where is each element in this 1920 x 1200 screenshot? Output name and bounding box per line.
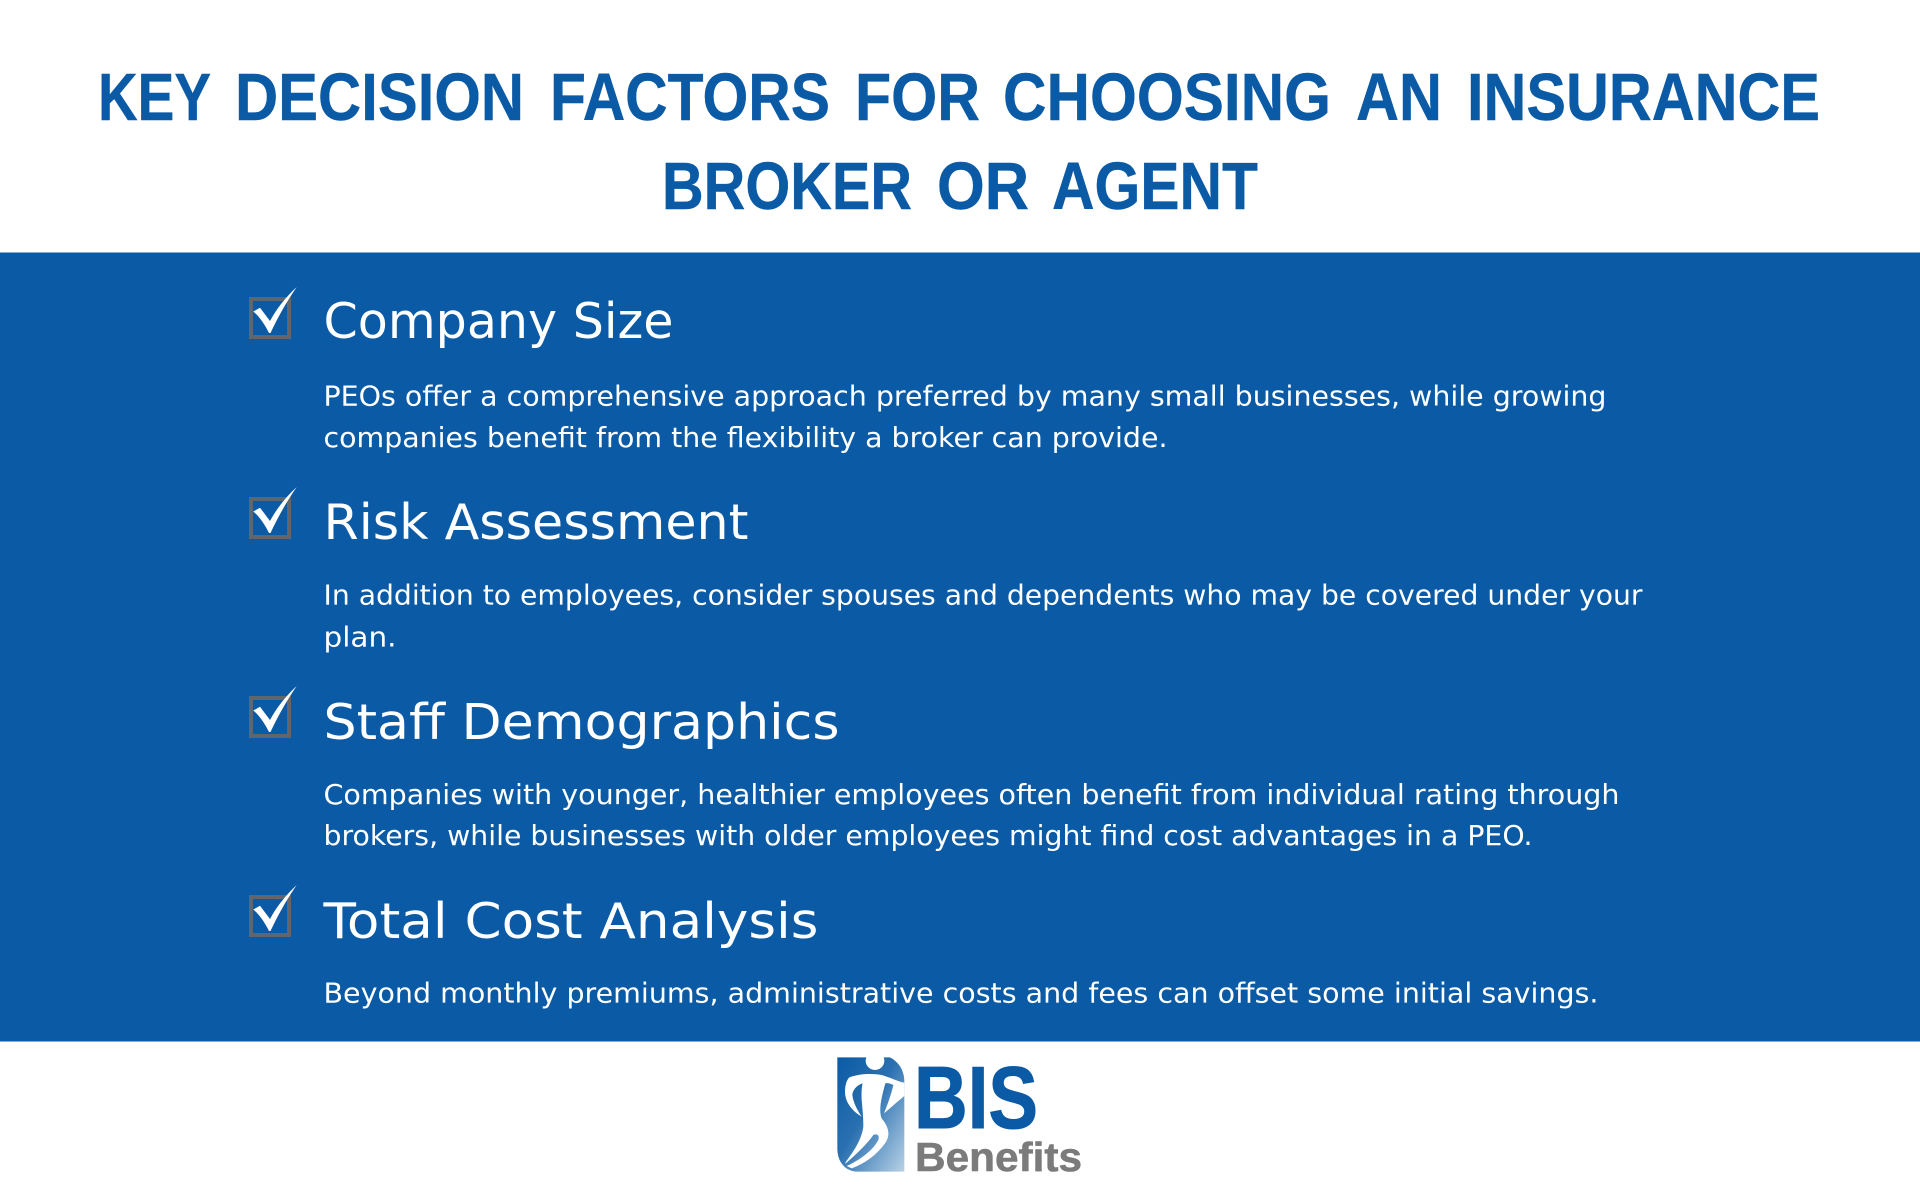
factor: total cost analysis: Total Cost Analysis — [322, 893, 818, 950]
title: INSURANCE — [1467, 60, 1820, 135]
factor: company size: Company Size — [324, 293, 674, 350]
title: DECISION — [235, 60, 524, 135]
panel: decision factors — [0, 252, 1920, 1042]
title: CHOOSING — [1003, 60, 1331, 135]
factor: risk assessment: Risk Assessment — [324, 494, 748, 551]
factor: risk assessment — [251, 487, 1643, 654]
factor: total cost analysis: Beyond monthly premiums, administrative costs and fees can offset some initial savings. — [324, 978, 1598, 1010]
factor: company size — [251, 287, 1606, 454]
factor: risk assessment: plan. — [324, 622, 396, 654]
title: OR — [937, 149, 1029, 224]
logo: BIS Benefits: BIS — [914, 1048, 1038, 1147]
title: FOR — [855, 60, 980, 135]
factor: staff demographics: Companies with younger, healthier employees often benefit from individual rating through — [324, 779, 1619, 811]
factor: risk assessment: In addition to employees, consider spouses and dependents who may be covered under your — [324, 580, 1643, 612]
factor: company size: companies benefit from the flexibility a broker can provide. — [324, 422, 1168, 454]
title: FACTORS — [550, 60, 830, 135]
factor: staff demographics: Staff Demographics — [324, 694, 840, 751]
factor: company size: PEOs offer a comprehensive approach preferred by many small businesses, while growing — [324, 380, 1606, 412]
title: AGENT — [1052, 149, 1258, 224]
title — [98, 60, 1820, 224]
factor: staff demographics: brokers, while businesses with older employees might find cost advantages in a PEO. — [324, 820, 1533, 852]
title: BROKER — [662, 149, 912, 224]
title: AN — [1356, 60, 1442, 135]
factor: staff demographics — [251, 686, 1619, 852]
icon: runner shield — [837, 1051, 904, 1172]
logo: BIS Benefits: Benefits — [915, 1134, 1082, 1180]
title: KEY — [98, 60, 211, 135]
factor: total cost analysis — [251, 885, 1598, 1010]
logo: BIS Benefits — [837, 1048, 1082, 1180]
